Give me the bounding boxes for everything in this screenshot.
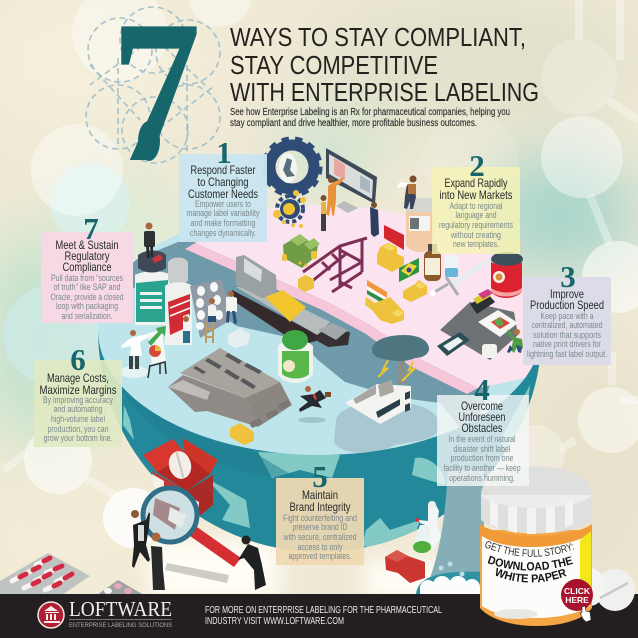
body: native print drivers for: [533, 339, 601, 349]
icon: cash stacks: [282, 234, 320, 268]
heading: [290, 488, 351, 514]
number 4: 4: [474, 372, 490, 407]
body: operations humming.: [449, 473, 515, 483]
body: production, you can: [48, 424, 108, 434]
person with megaphone: [397, 176, 416, 209]
footer band: [0, 594, 638, 638]
scientist with flask: [413, 501, 441, 553]
body: [43, 395, 113, 443]
bottle label text: WHITE PAPER: [496, 568, 567, 582]
icon: open red box with tablet: [143, 438, 218, 518]
body: Pull data from “sources: [51, 273, 123, 283]
heading: [458, 399, 506, 435]
body: changes dynamically.: [190, 228, 256, 238]
flood around factory: [334, 401, 439, 453]
heading: Manage Costs,: [47, 371, 109, 385]
cartons: [365, 243, 427, 324]
body: Adapt to regional: [450, 201, 502, 211]
heading: Improve: [550, 287, 584, 301]
lab people and ladder: [183, 291, 237, 343]
body: language and: [456, 210, 496, 220]
loose tablet: [228, 328, 250, 348]
bottle cap: [481, 466, 592, 534]
logo: [38, 597, 172, 629]
brown bottle: [424, 244, 441, 281]
body: manage label variability: [186, 208, 260, 218]
number 2: 2: [469, 148, 485, 183]
body: disaster shift label: [454, 444, 510, 454]
body: [186, 199, 260, 238]
magnifying glass: [143, 488, 241, 583]
peach jar: [406, 198, 433, 252]
body: new templates.: [453, 239, 499, 249]
heading: Unforeseen: [458, 410, 506, 424]
pink land: [195, 205, 533, 388]
dashed molecule behind the seven: [86, 7, 220, 163]
bottle label text: GET THE FULL STORY:: [485, 541, 574, 557]
heading: Customer Needs: [188, 187, 258, 201]
panel: 1: [179, 135, 267, 242]
people at monitor: [320, 177, 379, 237]
bottle label text: [485, 541, 574, 582]
click here button: HERE: [565, 595, 589, 605]
disc: top surface of the globe: [98, 205, 533, 455]
heading: Regulatory: [64, 249, 110, 263]
panel: 5: [276, 459, 364, 565]
panel: 3: [523, 259, 611, 365]
body: facility to another — keep: [444, 463, 520, 473]
continents: [123, 385, 530, 548]
body: approved templates.: [288, 551, 352, 561]
flag: Brazil: [399, 258, 419, 282]
title: WITH ENTERPRISE LABELING: [230, 77, 539, 107]
heading: Brand Integrity: [290, 500, 351, 514]
footer text: [205, 605, 442, 627]
globe: [98, 330, 542, 578]
title: STAY COMPETITIVE: [230, 50, 438, 80]
running businessman: [298, 386, 331, 423]
body: high-volume label: [51, 414, 105, 424]
body: By improving accuracy: [43, 395, 113, 405]
click here button: CLICK: [564, 586, 591, 596]
body: Empower users to: [195, 199, 251, 209]
title: [230, 22, 539, 107]
panel: 6: [34, 342, 122, 447]
icon: label printer: [437, 289, 523, 360]
body: [444, 434, 520, 483]
body: and make formatting: [190, 218, 256, 228]
logo: ENTERPRISE LABELING SOLUTIONS: [69, 623, 172, 629]
heading: [188, 163, 258, 201]
red jar: [491, 240, 523, 298]
body: solution that supports: [533, 330, 601, 340]
icon: green jar: [278, 330, 313, 383]
grey bottle: [165, 258, 192, 345]
flag: China: [384, 225, 404, 250]
subtitle: [230, 107, 510, 129]
heading: Maintain: [302, 488, 338, 502]
scientist with chart: [120, 326, 166, 378]
heading: Overcome: [461, 399, 503, 413]
icon: cargo ship: [232, 255, 350, 347]
water: [133, 242, 490, 427]
heading: [440, 176, 513, 202]
heading: Meet & Sustain: [56, 238, 118, 252]
icon: port crane: [303, 238, 367, 292]
number 6: 6: [70, 342, 86, 377]
person pushing paper: [507, 329, 523, 353]
loose tablets: [575, 568, 635, 611]
body: production from one: [450, 453, 514, 463]
blue bottle: [445, 255, 458, 277]
panel: 4: [437, 372, 529, 486]
body: grow your bottom line.: [44, 433, 112, 443]
icon: storm cloud and factory: [345, 335, 429, 424]
body: with secure, centralized: [283, 532, 356, 542]
heading: to Changing: [198, 175, 248, 189]
body: regulatory requirements: [439, 220, 513, 230]
blister packs: [0, 553, 144, 595]
heading: Compliance: [62, 260, 112, 274]
panel: 7: [41, 211, 133, 323]
businessmen: [131, 510, 266, 590]
pill card: [190, 279, 231, 338]
body: of truth” like SAP and: [54, 282, 120, 292]
click here button: [561, 579, 593, 611]
heading: Maximize Margins: [40, 383, 117, 397]
container on crane: [298, 275, 314, 292]
number 3: 3: [560, 259, 576, 294]
heading: [56, 238, 118, 274]
body: In the event of natural: [448, 434, 516, 444]
body: and serialization.: [62, 311, 112, 321]
heading: [530, 287, 604, 312]
pink land edge: [185, 243, 478, 394]
heading: Expand Rapidly: [444, 176, 508, 190]
body: without creating: [450, 230, 501, 240]
icon: monitor: [326, 148, 377, 213]
body: [50, 273, 124, 321]
icon: gears and coins: [265, 140, 319, 228]
bottle: download the white paper: [480, 466, 593, 626]
body: lightning fast label output.: [527, 349, 607, 359]
number 5: 5: [312, 459, 328, 494]
heading: Production Speed: [530, 298, 604, 312]
yellow cartons: [230, 423, 254, 445]
body: preserve brand ID: [292, 522, 348, 532]
heading: Obstacles: [462, 421, 503, 435]
bottle with person on top: [135, 222, 170, 325]
body: [283, 513, 357, 561]
body: access to only: [298, 542, 343, 552]
foam: [416, 562, 484, 596]
footer text: INDUSTRY VISIT WWW.LOFTWARE.COM: [205, 616, 344, 627]
body: and automating: [54, 404, 102, 414]
flag: India: [367, 280, 387, 306]
footer text: FOR MORE ON ENTERPRISE LABELING FOR THE PHARMACEUTICAL: [205, 605, 442, 616]
body: Fight counterfeiting and: [283, 513, 357, 523]
heading: [40, 371, 117, 397]
logo: LOFTWARE: [69, 597, 172, 621]
body: [439, 201, 513, 249]
number 1: 1: [216, 135, 232, 170]
body: Oracle, provide a closed: [50, 292, 124, 302]
body: centralized, automated: [532, 320, 602, 330]
bottles in expansion area: [397, 176, 523, 298]
heading: Respond Faster: [190, 163, 256, 177]
bottle label text: DOWNLOAD THE: [488, 556, 573, 570]
number 7: 7: [83, 211, 99, 246]
body: Keep pace with a: [540, 311, 594, 321]
title: WAYS TO STAY COMPLIANT,: [230, 22, 526, 52]
red cartons: [385, 550, 425, 583]
panel: 2: [432, 148, 520, 254]
subtitle: See how Enterprise Labeling is an Rx for pharmaceutical companies, helping you: [230, 107, 510, 118]
body: loop with packaging: [56, 301, 118, 311]
subtitle: stay compliant and drive healthier, more profitable business outcomes.: [230, 118, 477, 129]
man standing: [144, 222, 155, 258]
heading: into New Markets: [440, 188, 513, 202]
slate shoreline falling to the foam: [430, 470, 484, 578]
flags and cartons: [365, 225, 427, 324]
body: [527, 311, 607, 359]
easel: [148, 326, 166, 378]
syringe: [430, 258, 491, 296]
hand cursor: [580, 606, 591, 622]
icon: warehouse: [168, 348, 292, 428]
